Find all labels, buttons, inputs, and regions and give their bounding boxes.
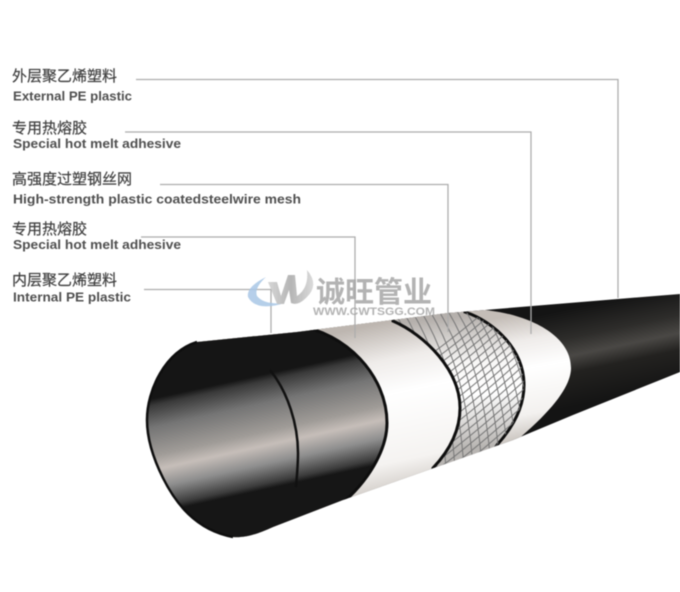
steel wire mesh layer — [396, 310, 526, 468]
label: external PE plastic: 外层聚乙烯塑料 — [12, 68, 117, 85]
label: special hot melt adhesive (inner) — [12, 221, 181, 252]
logo url: WWW.CWTSGG.COM — [313, 306, 435, 318]
label: special hot melt adhesive (outer): 专用热熔胶 — [12, 120, 87, 137]
leader line: internal PE — [144, 290, 271, 333]
icon: grey W mark — [268, 270, 313, 304]
icon: blue crescent — [248, 277, 285, 306]
label: special hot melt adhesive (outer) — [12, 120, 181, 151]
pipe — [148, 293, 680, 538]
white adhesive layer (outer) — [468, 309, 572, 446]
label: special hot melt adhesive (inner): Special hot melt adhesive — [13, 237, 181, 252]
label: steel wire mesh: High-strength plastic coatedsteelwire mesh — [13, 192, 301, 206]
leader line: adhesive outer — [125, 132, 531, 334]
leader line: adhesive inner — [141, 237, 355, 338]
label: internal PE plastic — [12, 272, 131, 304]
label: external PE plastic — [12, 68, 132, 104]
inner seam line — [270, 370, 298, 487]
outer black PE layer — [397, 293, 680, 446]
label: steel wire mesh — [12, 171, 301, 206]
leader line: mesh — [160, 184, 448, 332]
leader line: external PE — [136, 80, 618, 298]
label: internal PE plastic: Internal PE plastic — [13, 290, 131, 304]
label: special hot melt adhesive (outer): Special hot melt adhesive — [13, 136, 181, 151]
inner black PE layer — [148, 328, 390, 538]
logo name: 诚旺管业 — [316, 276, 432, 309]
watermark logo — [248, 270, 435, 318]
label: steel wire mesh: 高强度过塑钢丝网 — [12, 171, 132, 188]
label: special hot melt adhesive (inner): 专用热熔胶 — [12, 221, 87, 238]
label: internal PE plastic: 内层聚乙烯塑料 — [12, 272, 117, 289]
white adhesive layer (inner) — [338, 319, 462, 497]
pipe end outline — [147, 342, 233, 537]
label: external PE plastic: External PE plastic — [13, 88, 132, 104]
